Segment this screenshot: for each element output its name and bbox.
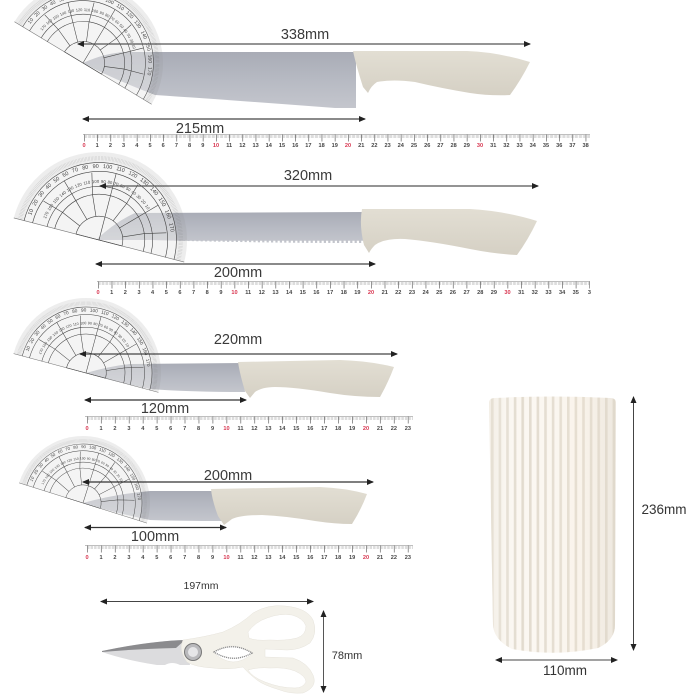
knife 3: utility knife xyxy=(86,360,394,398)
ruler 1: 17 xyxy=(305,143,312,149)
scissors serrated opening xyxy=(214,647,252,658)
dimension: 200mm paring: 200mm xyxy=(204,468,252,484)
ruler 1: 1 xyxy=(96,143,99,149)
ruler 2: 35 xyxy=(573,290,579,296)
ruler 1: 33 xyxy=(516,143,523,149)
ruler 3: 18 xyxy=(335,426,341,432)
protractor 1 xyxy=(14,0,162,104)
ruler 3: 4 xyxy=(141,426,145,432)
ruler 1: 21 xyxy=(358,143,364,149)
ruler 3: 6 xyxy=(169,426,172,432)
ruler 1: 16 xyxy=(292,143,298,149)
ruler 2: 9 xyxy=(219,290,222,296)
ruler 1: 12 xyxy=(239,143,246,149)
ruler 1: 7 xyxy=(175,143,178,149)
protractor 4: 10 20 30 40 50 60 70 80 90 100 110 120 130 140 150 160 170 xyxy=(30,445,141,500)
ruler 3: 20 xyxy=(363,426,369,432)
scissors handles xyxy=(181,606,315,693)
ruler 3: 19 xyxy=(349,426,355,432)
ruler 1: 9 xyxy=(201,143,204,149)
ruler 3: 23 xyxy=(405,426,411,432)
ruler 2: 13 xyxy=(272,290,279,296)
ruler 3: 21 xyxy=(377,426,383,432)
ruler 1: 36 xyxy=(556,143,562,149)
ruler 4 xyxy=(85,546,413,561)
ruler 2: 31 xyxy=(518,290,524,296)
ruler 1: 38 xyxy=(582,143,589,149)
ruler 3: 22 xyxy=(391,426,397,432)
ruler 2: 19 xyxy=(354,290,361,296)
dimension: 215mm: 215mm xyxy=(176,121,224,137)
ruler 4: 23 xyxy=(405,555,411,561)
knife 2 serrated edge xyxy=(150,241,364,243)
ruler 1: 8 xyxy=(188,143,191,149)
ruler 4: 11 xyxy=(238,555,243,561)
ruler 2: 23 xyxy=(409,290,415,296)
ruler 1: 4 xyxy=(135,143,139,149)
ruler 2: 25 xyxy=(436,290,442,296)
ruler 2: 29 xyxy=(491,290,497,296)
scissors blade xyxy=(102,640,190,665)
ruler 3: 7 xyxy=(183,426,186,432)
ruler 2: 17 xyxy=(327,290,333,296)
ruler 4: 2 xyxy=(113,555,116,561)
ruler 1: 14 xyxy=(266,143,273,149)
ruler 4: 20 xyxy=(363,555,369,561)
protractor 2: 10 20 30 40 50 60 70 80 90 100 110 120 130 140 150 160 170 xyxy=(28,164,174,232)
ruler 3: 1 xyxy=(99,426,103,432)
ruler 2: 18 xyxy=(341,290,347,296)
ruler 2: 8 xyxy=(206,290,209,296)
ruler 3: 3 xyxy=(127,426,130,432)
ruler 3: 5 xyxy=(155,426,158,432)
ruler 4: 22 xyxy=(391,555,397,561)
ruler 4: 12 xyxy=(251,555,258,561)
protractor 3: 10 20 30 40 50 60 70 80 90 100 110 120 130 140 150 160 170 xyxy=(26,308,150,366)
ruler 3: 0 xyxy=(85,426,89,432)
ruler 4: 8 xyxy=(197,555,200,561)
dimension: 200mm: 200mm xyxy=(214,265,262,281)
knife 3 handle xyxy=(238,360,394,398)
dimension: 236mm: 236mm xyxy=(641,502,687,517)
ruler 3: 15 xyxy=(293,426,299,432)
ruler 2: 1 xyxy=(110,290,113,296)
ruler 4: 5 xyxy=(155,555,158,561)
ruler 1: 19 xyxy=(332,143,338,149)
knife 1: chef knife xyxy=(83,51,530,108)
ruler 1: 13 xyxy=(252,143,259,149)
dimension: 320mm: 320mm xyxy=(284,168,332,184)
ruler 2: 28 xyxy=(477,290,483,296)
ruler 1: 28 xyxy=(450,143,457,149)
ruler 4: 10 xyxy=(223,555,230,561)
ruler 1: 2 xyxy=(109,143,112,149)
ruler 4: 21 xyxy=(377,555,383,561)
ruler 2: 5 xyxy=(165,290,168,296)
ruler 1: 3 xyxy=(122,143,125,149)
ruler 1: 29 xyxy=(464,143,470,149)
ruler 2: 33 xyxy=(545,290,552,296)
ruler 1: 26 xyxy=(424,143,430,149)
dimension: 197mm: 197mm xyxy=(183,580,219,592)
ruler 2: 24 xyxy=(422,290,430,296)
dimension: 338mm: 338mm xyxy=(281,27,329,43)
ruler 2: 11 xyxy=(245,290,251,296)
ruler 2: 22 xyxy=(395,290,401,296)
ruler 1: 35 xyxy=(543,143,549,149)
ruler 1: 30 xyxy=(477,143,483,149)
protractor 4: 170 160 150 140 130 120 110 100 90 80 70 60 50 40 30 20 10 xyxy=(42,457,123,485)
ruler 4: 18 xyxy=(335,555,341,561)
scissors xyxy=(102,606,315,693)
ruler 2: 27 xyxy=(463,290,470,296)
ruler 1: 11 xyxy=(226,143,232,149)
protractor 1: 170 160 150 140 130 120 110 100 90 80 70 60 50 40 30 20 10 xyxy=(40,8,136,49)
ruler 4: 7 xyxy=(183,555,186,561)
ruler 1: 32 xyxy=(503,143,510,149)
ruler 1: 0 xyxy=(82,143,86,149)
ruler 2: 0 xyxy=(96,290,100,296)
ruler 2: 3 xyxy=(588,290,591,296)
ruler 1: 18 xyxy=(318,143,325,149)
ruler 1 xyxy=(82,134,590,149)
ruler 3: 11 xyxy=(238,426,243,432)
ruler 4: 13 xyxy=(265,555,272,561)
ruler 2: 21 xyxy=(382,290,388,296)
ruler 4: 3 xyxy=(127,555,130,561)
ruler 4: 9 xyxy=(211,555,214,561)
dimension: 120mm: 120mm xyxy=(141,401,189,417)
ruler 4: 16 xyxy=(307,555,313,561)
dimension: 110mm: 110mm xyxy=(543,663,587,678)
knife block holder xyxy=(489,396,616,653)
knife 4 blade xyxy=(83,491,224,521)
ruler 4: 14 xyxy=(279,555,286,561)
ruler 3: 2 xyxy=(113,426,116,432)
knife 4 handle xyxy=(211,487,367,525)
ruler 4: 4 xyxy=(141,555,145,561)
ruler 2: 15 xyxy=(300,290,306,296)
ruler 2: 12 xyxy=(259,290,265,296)
ruler 1: 37 xyxy=(569,143,576,149)
ruler 1: 23 xyxy=(384,143,391,149)
ruler 3: 17 xyxy=(321,426,327,432)
ruler 2: 34 xyxy=(559,290,566,296)
knife 2 blade xyxy=(96,212,364,243)
holder shading xyxy=(489,396,616,653)
ruler 3: 8 xyxy=(197,426,200,432)
ruler 2: 6 xyxy=(178,290,181,296)
dimension: 220mm: 220mm xyxy=(214,332,262,348)
ruler 1: 34 xyxy=(530,143,537,149)
holder body xyxy=(489,396,616,653)
ruler 3: 12 xyxy=(251,426,258,432)
ruler 1: 22 xyxy=(371,143,378,149)
ruler 1: 6 xyxy=(162,143,165,149)
ruler 4: 19 xyxy=(349,555,355,561)
knife 1 blade xyxy=(83,52,356,108)
ruler 2: 14 xyxy=(286,290,293,296)
ruler 1: 24 xyxy=(398,143,405,149)
dimension: 110mm xyxy=(496,660,617,678)
protractor 3: 170 160 150 140 130 120 110 100 90 80 70 60 50 40 30 20 10 xyxy=(39,322,129,354)
ruler 2: 20 xyxy=(368,290,374,296)
ruler 2: 10 xyxy=(231,290,238,296)
ruler 4: 1 xyxy=(99,555,103,561)
knife 4: paring knife xyxy=(83,487,367,525)
ruler 4: 17 xyxy=(321,555,327,561)
ruler 2: 7 xyxy=(192,290,195,296)
protractor 2 xyxy=(14,152,187,262)
ruler 3 xyxy=(85,416,413,432)
ruler 1: 31 xyxy=(490,143,496,149)
knife 1 handle xyxy=(353,51,530,95)
ruler 2: 30 xyxy=(504,290,511,296)
ruler 2: 16 xyxy=(313,290,320,296)
knife 2: bread knife xyxy=(96,209,537,255)
ruler 1: 20 xyxy=(345,143,351,149)
ruler 4: 6 xyxy=(169,555,172,561)
ruler 2: 32 xyxy=(532,290,538,296)
protractor 4 xyxy=(19,436,150,524)
ruler 4: 15 xyxy=(293,555,299,561)
ruler 2: 3 xyxy=(137,290,141,296)
ruler 3: 16 xyxy=(307,426,313,432)
ruler 1: 10 xyxy=(213,143,219,149)
ruler 2: 26 xyxy=(450,290,456,296)
ruler 2: 4 xyxy=(151,290,155,296)
knife 2 handle xyxy=(361,209,537,255)
protractor 2: 170 160 150 140 130 120 110 100 90 80 70 60 50 40 30 20 10 xyxy=(44,180,150,219)
ruler 2: 2 xyxy=(124,290,127,296)
ruler 4: 0 xyxy=(85,555,89,561)
scissors pivot xyxy=(184,644,202,660)
dimension: 78mm xyxy=(324,611,362,692)
knife 3 blade xyxy=(86,363,245,392)
ruler 2 xyxy=(96,282,591,296)
ruler 1: 27 xyxy=(437,143,444,149)
ruler 1: 15 xyxy=(279,143,285,149)
ruler 3: 10 xyxy=(223,426,230,432)
protractor 3 xyxy=(14,298,160,393)
ruler 3: 9 xyxy=(211,426,214,432)
ruler 3: 13 xyxy=(265,426,272,432)
dimension: 100mm: 100mm xyxy=(131,529,179,545)
dimension: 78mm: 78mm xyxy=(332,650,362,662)
ruler 3: 14 xyxy=(279,426,286,432)
ruler 1: 25 xyxy=(411,143,417,149)
ruler 1: 5 xyxy=(148,143,152,149)
